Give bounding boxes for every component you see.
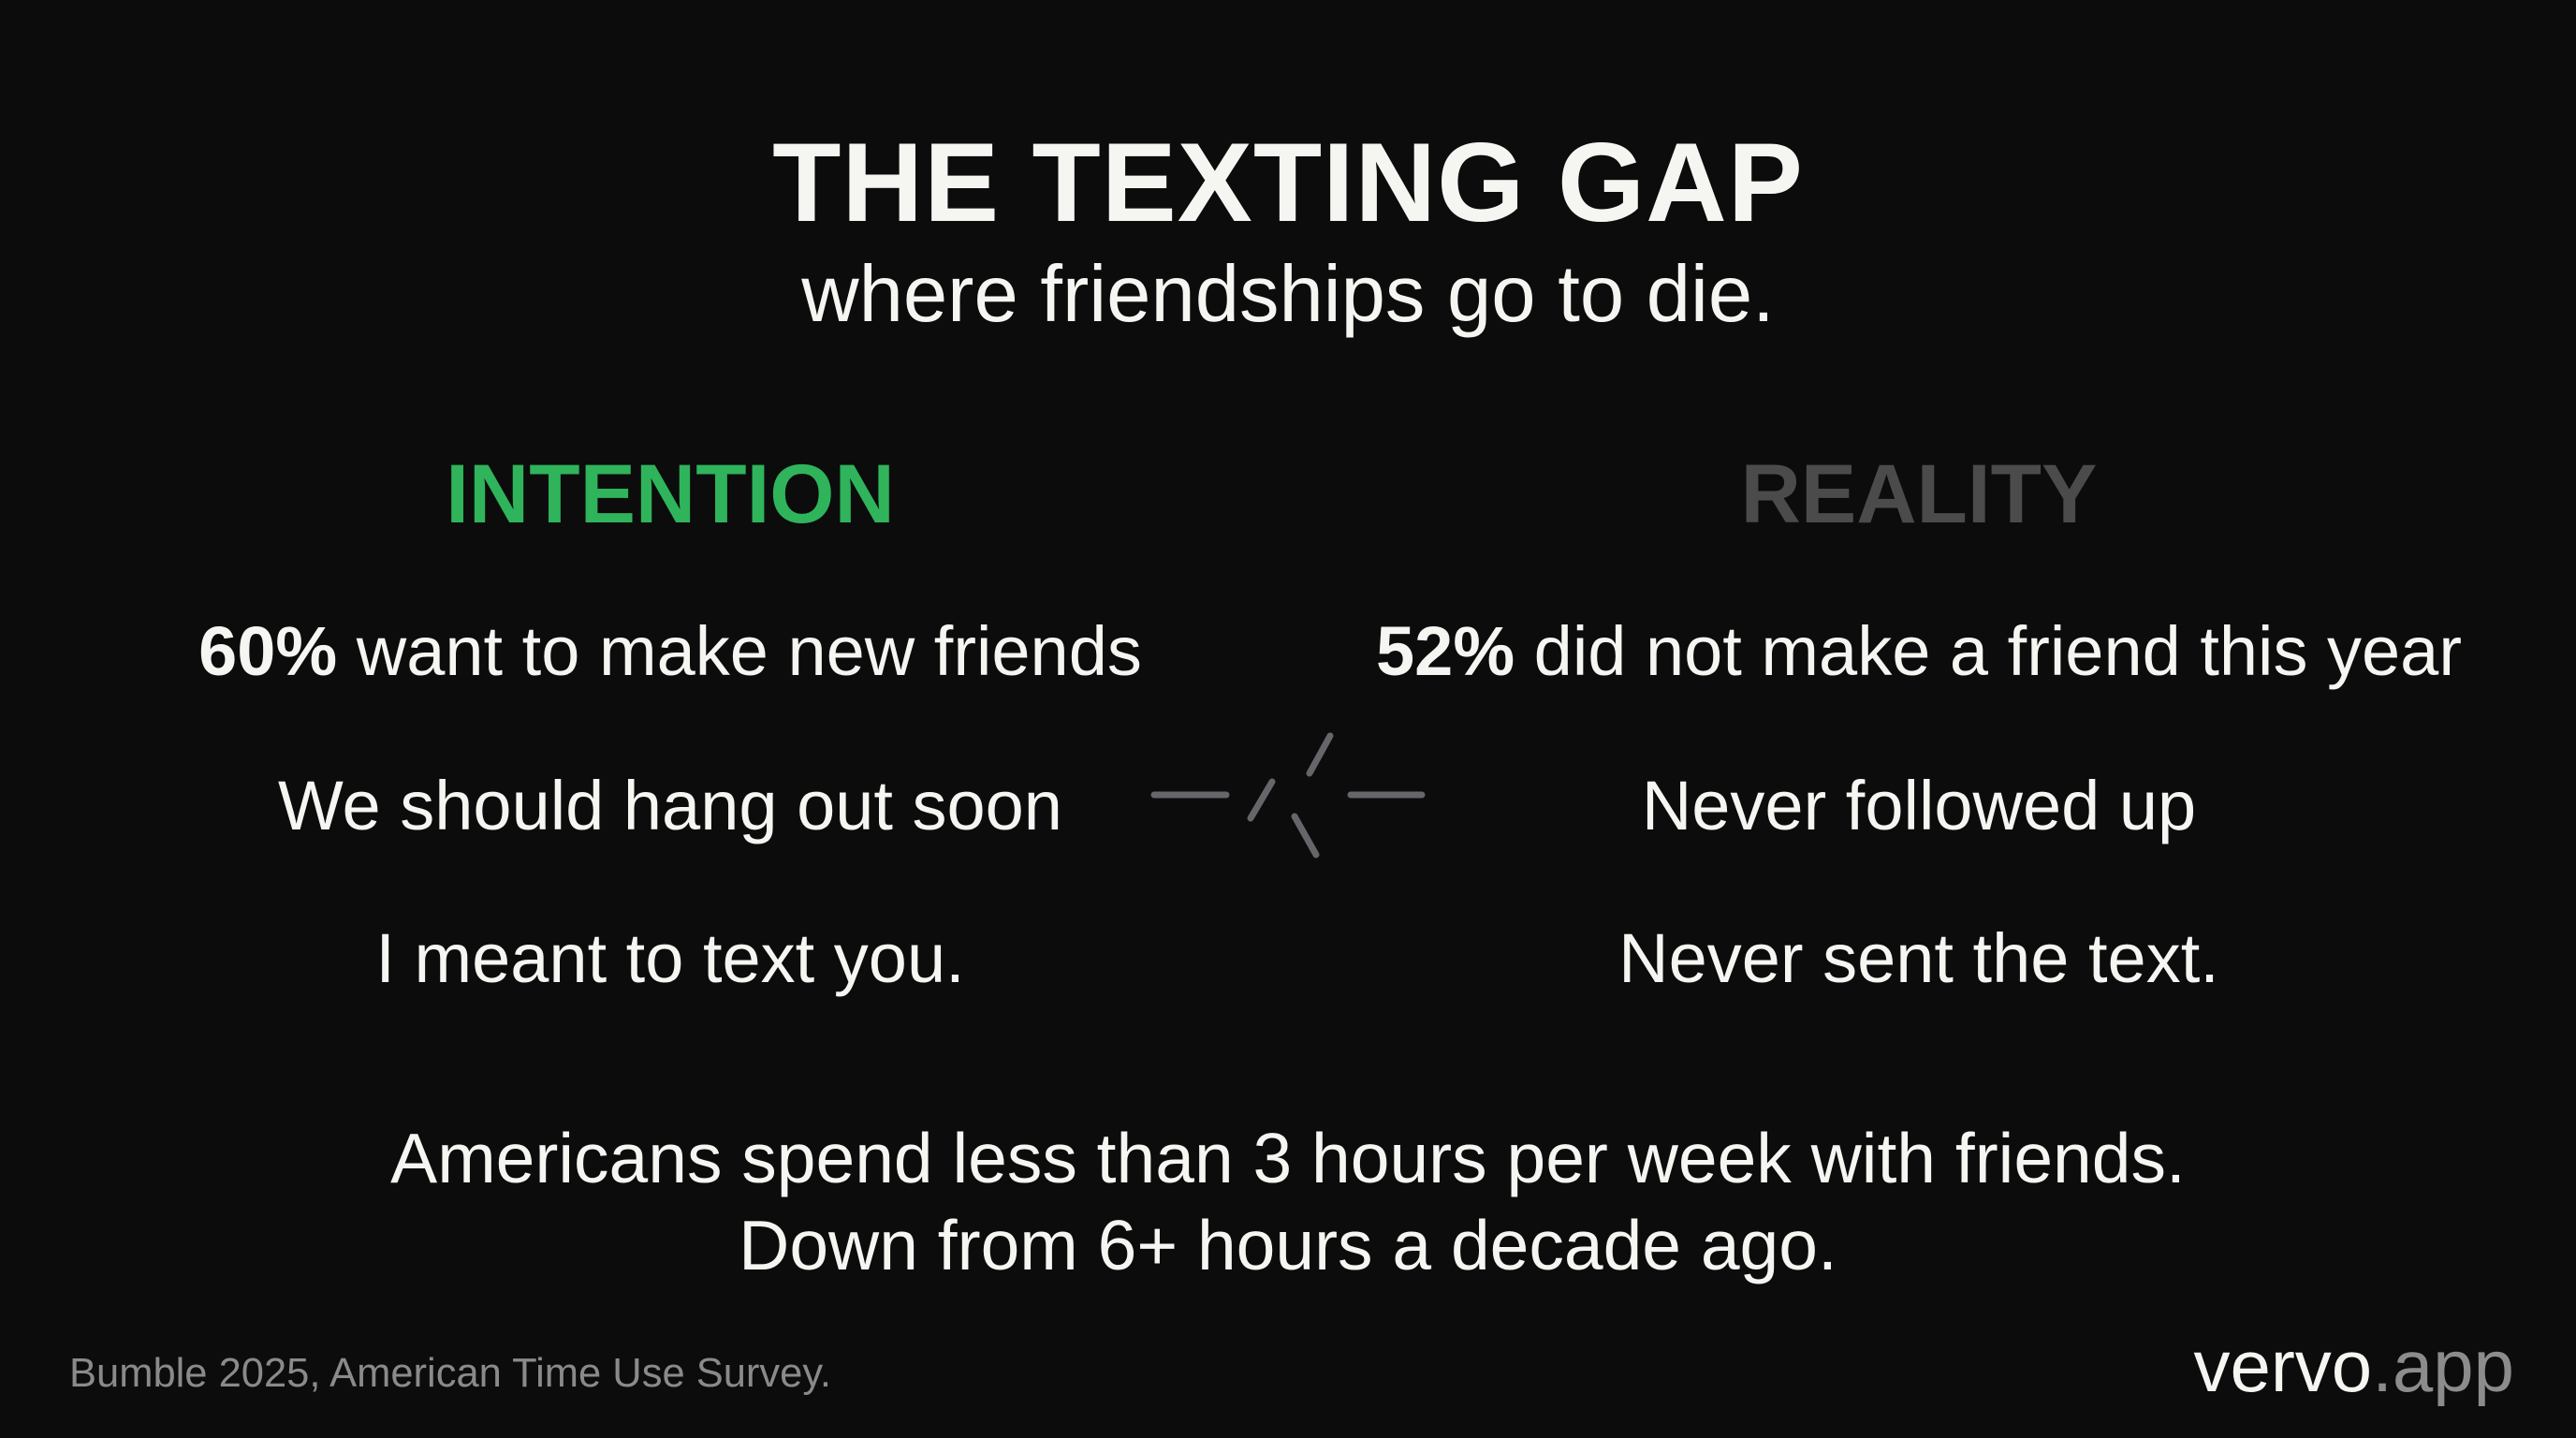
intention row 1: 60% want to make new friends: [198, 612, 1142, 690]
heading: reality: REALITY: [1741, 447, 2097, 540]
reality row 2: Never followed up: [1642, 767, 2196, 844]
title: THE TEXTING GAP: [772, 120, 1804, 245]
subtitle: where friendships go to die.: [801, 250, 1775, 339]
logo: vervo.app: vervo.app: [2193, 1325, 2514, 1407]
bottom statement: Americans spend less than 3 hours per week with friends.: [390, 1119, 2186, 1197]
bottom statement: Down from 6+ hours a decade ago.: [739, 1206, 1837, 1284]
reality row 1: 52% did not make a friend this year: [1376, 612, 2462, 690]
intention row 2: We should hang out soon: [278, 767, 1062, 844]
bottom statement: [390, 1119, 2186, 1284]
reality column: [1376, 612, 2462, 997]
reality row 3: Never sent the text.: [1618, 919, 2219, 997]
intention column: [198, 612, 1142, 997]
heading: intention: INTENTION: [446, 447, 895, 540]
source note: Bumble 2025, American Time Use Survey.: [69, 1351, 831, 1396]
icon: broken connection: [1151, 732, 1425, 858]
intention row 3: I meant to text you.: [375, 919, 965, 997]
